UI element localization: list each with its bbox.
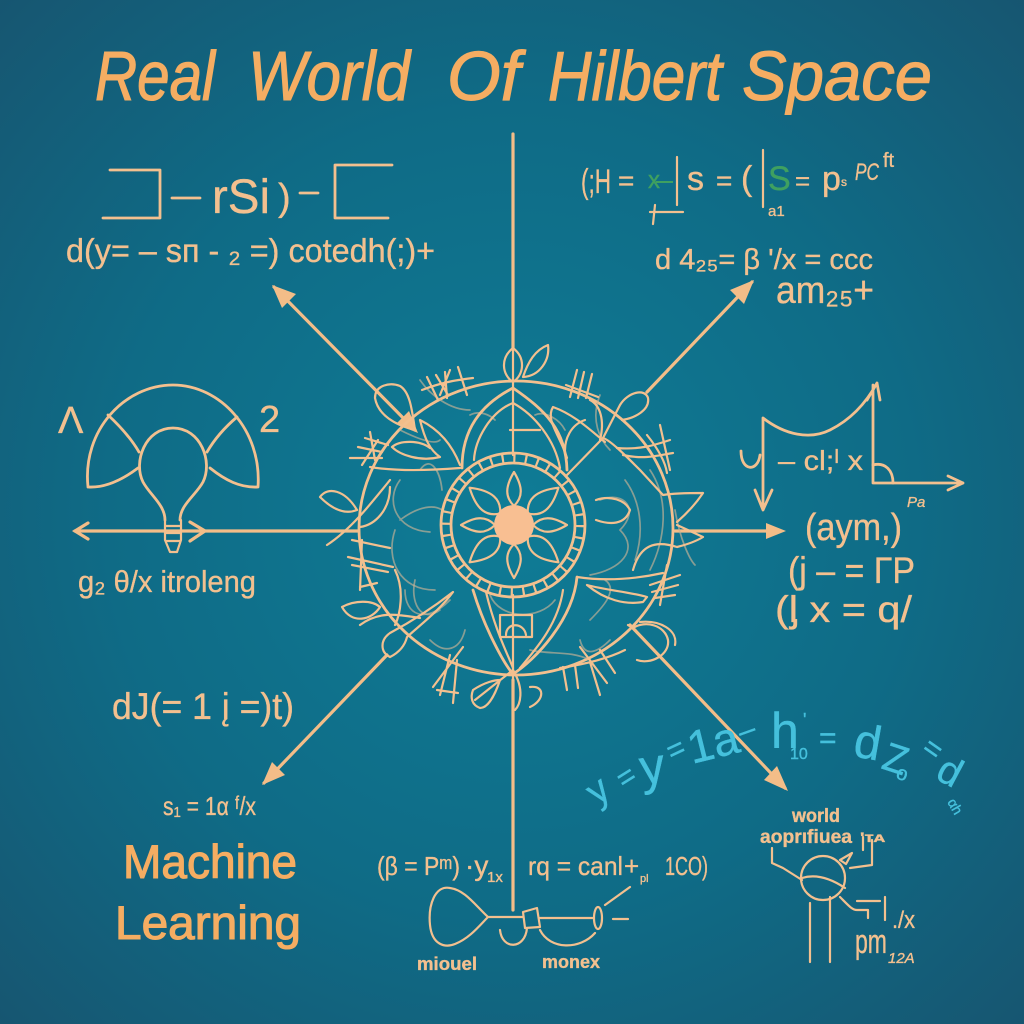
outer ring bbox=[359, 381, 673, 675]
top-right formula bbox=[581, 150, 895, 312]
left bulb diagram: g₂ θ/x itroleng bbox=[78, 564, 256, 599]
blue curved formula: = bbox=[610, 759, 643, 796]
blue curved formula: αh bbox=[944, 796, 966, 817]
lens shape bbox=[462, 388, 577, 674]
top-right formula: d 4₂₅= β '/x = ccc bbox=[655, 244, 873, 276]
bottom-center formula and diagram: ·y bbox=[465, 850, 488, 881]
blue curved formula: Z bbox=[877, 735, 914, 784]
top-left formula bbox=[66, 165, 435, 269]
arrows radiating from centre bbox=[75, 134, 788, 910]
title: Of bbox=[447, 37, 526, 115]
bottom-right world diagram: world bbox=[791, 806, 840, 827]
top-right formula: PC bbox=[855, 159, 879, 186]
right graph: (ᶅ x = q/ bbox=[775, 589, 913, 630]
top-right formula: = bbox=[618, 165, 634, 196]
bottom-right world diagram: ./x bbox=[892, 907, 915, 934]
title: World bbox=[248, 37, 412, 115]
bottom-center formula and diagram bbox=[377, 850, 708, 974]
top-right formula: x bbox=[648, 167, 660, 194]
top-right formula: s bbox=[687, 160, 704, 198]
flower petals bbox=[461, 472, 567, 578]
left bulb diagram bbox=[58, 385, 280, 599]
top-right formula: = bbox=[795, 166, 810, 196]
top-right formula: s bbox=[841, 175, 847, 189]
Machine Learning label: Learning bbox=[115, 896, 301, 949]
right graph bbox=[741, 383, 963, 630]
centre axis bbox=[475, 350, 540, 700]
bottom-center formula and diagram: 1CO) bbox=[665, 851, 708, 881]
right graph: (j – = ΓP bbox=[788, 550, 915, 591]
bottom-center formula and diagram: pl bbox=[640, 873, 649, 885]
top-left formula: ) bbox=[278, 177, 291, 219]
top-left formula: rSi bbox=[212, 171, 270, 224]
lower-left formulas bbox=[112, 686, 294, 821]
bottom-center formula and diagram: 1x bbox=[487, 869, 503, 886]
left bulb diagram: 2 bbox=[259, 399, 280, 441]
title bbox=[95, 37, 932, 115]
bottom-center formula and diagram: (β = Pᵐ) bbox=[377, 851, 460, 881]
title: Space bbox=[742, 37, 932, 115]
blue curved formula: o bbox=[893, 762, 911, 786]
blue curved formula bbox=[578, 703, 970, 817]
bottom-right world diagram: aoprıfiuea bbox=[760, 827, 852, 848]
blue curved formula: d bbox=[850, 715, 886, 771]
blue curved formula: d bbox=[930, 747, 970, 796]
middle ring bbox=[441, 453, 585, 597]
top-right formula: ( bbox=[741, 160, 753, 198]
blue curved formula: ' bbox=[803, 710, 806, 730]
lower-left formulas: s₁ = 1α ᶠ/x bbox=[163, 791, 256, 821]
top-left formula: d(y= – sп - ₂ =) cotedh(;)+ bbox=[66, 232, 435, 269]
right graph: – cl;ˡ x bbox=[778, 445, 863, 476]
bottom-center formula and diagram: miouel bbox=[417, 954, 477, 974]
bottom-right world diagram: pm bbox=[855, 923, 887, 961]
bottom-right world diagram bbox=[760, 806, 915, 967]
bottom-center formula and diagram: + bbox=[624, 851, 639, 881]
blue curved formula: 1a bbox=[682, 711, 744, 774]
hatch marks bbox=[348, 367, 680, 703]
right graph: (aym,) bbox=[805, 507, 902, 549]
bottom-center formula and diagram: monex bbox=[542, 952, 600, 972]
leaves bbox=[320, 345, 703, 710]
blue curved formula: y bbox=[636, 737, 668, 796]
blue curved formula: – bbox=[733, 712, 760, 749]
Machine Learning label bbox=[115, 835, 301, 949]
top-right formula: (;H bbox=[581, 163, 611, 201]
top-right formula: p bbox=[822, 160, 841, 198]
sun core bbox=[494, 505, 534, 545]
top-right formula: ft bbox=[883, 150, 895, 172]
blue curved formula: = bbox=[916, 731, 949, 768]
blue curved formula: 10 bbox=[790, 746, 808, 763]
top-right formula: am₂₅+ bbox=[776, 270, 874, 312]
top-right formula: = bbox=[716, 165, 732, 196]
bottom-center formula and diagram: rq = canl bbox=[528, 851, 623, 881]
bottom-right world diagram: 'ᴛᴀ bbox=[860, 829, 886, 845]
faint inner swirls bbox=[392, 380, 695, 660]
Machine Learning label: Machine bbox=[123, 835, 297, 888]
bottom-right world diagram: 12A bbox=[888, 950, 915, 967]
title: Real bbox=[95, 37, 217, 115]
top-right formula: S bbox=[768, 160, 791, 198]
left bulb diagram: Λ bbox=[58, 400, 84, 442]
blue curved formula: h bbox=[771, 703, 799, 759]
lower-left formulas: dJ(= 1 į =)t) bbox=[112, 686, 294, 727]
blue curved formula: y bbox=[578, 768, 618, 813]
title: Hilbert bbox=[548, 37, 724, 115]
blue curved formula: = bbox=[661, 731, 691, 768]
blue curved formula: = bbox=[819, 722, 837, 755]
central mandala bbox=[320, 345, 703, 710]
top-right formula: a1 bbox=[768, 203, 785, 220]
right graph: Pa bbox=[907, 494, 925, 511]
